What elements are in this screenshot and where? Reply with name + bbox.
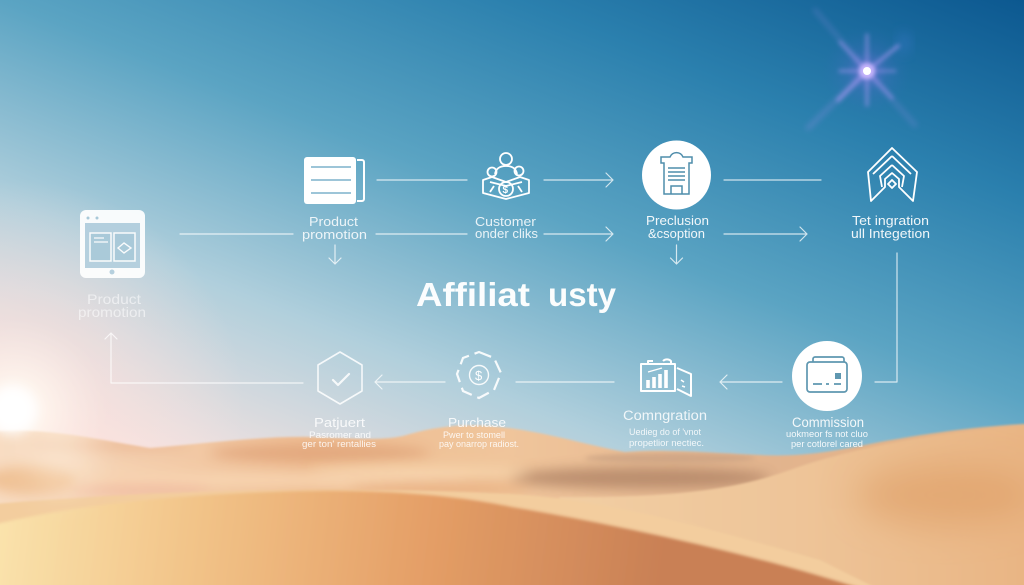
icon: browser tablet — [80, 210, 145, 278]
label: Tet ingration ull Integetion — [851, 213, 930, 241]
icon: layered house — [868, 148, 917, 201]
label: Customer onder cliks — [475, 214, 539, 241]
label: Customer onder cliks: onder cliks — [475, 226, 539, 241]
title — [416, 276, 617, 313]
icon: dollar dashed octagon — [457, 352, 501, 398]
label: Product promotion, left: promotion — [78, 304, 146, 320]
icon: dollar dashed octagon: $ — [475, 368, 483, 383]
label: Comngration step text: Comngration — [623, 408, 707, 423]
icon: check hexagon — [318, 352, 362, 404]
background: sun flare on horizon — [0, 386, 36, 434]
flow diagram — [78, 140, 930, 449]
label: Customer onder cliks: Customer — [475, 214, 537, 229]
label: Preclusion & csoption: &csoption — [648, 226, 705, 241]
icon: calendar chart — [641, 359, 691, 396]
middle pale sand band — [0, 490, 900, 585]
label: Purchase step text: Pwer to stomell — [443, 430, 505, 440]
label: Commission step text: Commission — [792, 415, 864, 430]
label: Purchase step text — [439, 415, 519, 449]
label: Commission step text: uokmeor fs not cluo — [786, 429, 868, 439]
label: Product promotion: Product — [309, 214, 358, 229]
icon: building in white circle — [642, 140, 711, 210]
label: Patjuert step text — [302, 415, 377, 449]
label: Patjuert step text: Patjuert — [314, 415, 365, 430]
front dune — [0, 491, 880, 585]
label: Comngration step text: propetlior nectiec. — [629, 438, 704, 448]
title: usty — [548, 276, 617, 313]
label: Patjuert step text: Pasromer and — [309, 430, 371, 440]
label: Tet ingration ull Integetion: ull Integetion — [851, 226, 930, 241]
icon: customers with money: $ — [502, 185, 508, 196]
label: Preclusion & csoption — [646, 213, 709, 241]
label: Product promotion: promotion — [302, 227, 367, 242]
label: Purchase step text: pay onarrop radiost. — [439, 439, 519, 449]
title: Affiliat — [416, 276, 530, 313]
desert dunes — [0, 422, 1024, 585]
label: Patjuert step text: ger ton' rentallies — [302, 439, 377, 449]
icon: customers with money — [483, 153, 529, 199]
label: Tet ingration ull Integetion: Tet ingration — [852, 213, 929, 228]
label: Product promotion — [302, 214, 367, 242]
label: Preclusion & csoption: Preclusion — [646, 213, 709, 228]
icon: wallet in white circle — [792, 341, 862, 411]
icon: purple lens-flare star — [808, 10, 915, 128]
label: Purchase step text: Purchase — [448, 415, 506, 430]
background: sunlit glow, lower left — [0, 170, 260, 585]
icon: newspaper document — [304, 157, 364, 204]
label: Product promotion, left: Product — [87, 291, 141, 307]
label: Product promotion, left — [78, 291, 146, 320]
label: Comngration step text: Uedieg do of 'vnot — [629, 427, 701, 437]
right big dune — [562, 442, 917, 585]
connector lines and arrows — [105, 173, 897, 389]
label: Commission step text: per cotlorel cared — [791, 439, 863, 449]
label: Commission step text — [786, 415, 868, 449]
label: Comngration step text — [623, 408, 707, 448]
